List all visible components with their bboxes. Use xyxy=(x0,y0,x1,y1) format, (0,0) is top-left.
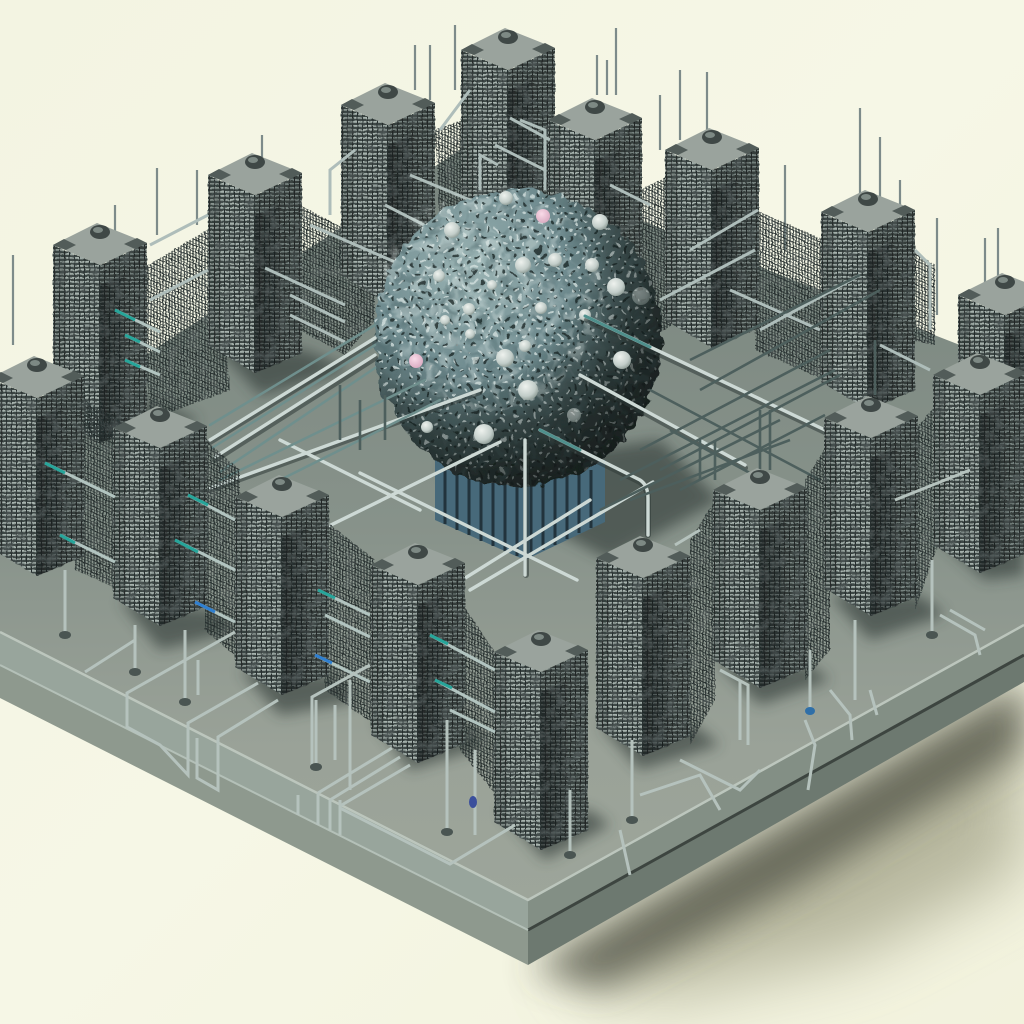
tower: front 5 xyxy=(235,475,329,695)
main pipes from the core xyxy=(210,316,825,600)
tower: front corner 10 xyxy=(494,630,588,850)
tower: back row 6 xyxy=(341,83,435,303)
tower: right 15 xyxy=(824,396,918,616)
tower: back row 9 xyxy=(548,98,642,318)
tower: left 2 xyxy=(53,223,147,443)
tower: left 4 xyxy=(208,153,302,373)
tower: right 13 xyxy=(713,468,807,688)
tower: front 7 xyxy=(371,543,465,763)
tower: left 3 xyxy=(113,406,207,626)
tower: front 11 xyxy=(596,536,690,756)
right side pipe bundles xyxy=(340,275,880,510)
post foot nodes xyxy=(59,631,938,859)
tower: left front 1 xyxy=(0,356,84,576)
platform xyxy=(0,150,1024,965)
tower: far right 17 xyxy=(958,273,1024,493)
heat sink base under the core xyxy=(435,460,605,560)
tower: right 14 xyxy=(821,190,915,410)
mesh between front towers xyxy=(75,395,940,800)
tower: far right 16 xyxy=(933,353,1024,573)
pipes behind the core xyxy=(150,90,930,370)
tower: back row 12 xyxy=(665,128,759,348)
central core sphere xyxy=(374,189,662,487)
core nodules xyxy=(421,191,650,444)
antennas xyxy=(13,25,998,345)
platform cast shadow xyxy=(530,680,1024,1000)
pink nodules xyxy=(409,209,550,368)
tower shadows on floor xyxy=(70,345,1024,860)
floor pipes and posts xyxy=(65,470,985,875)
tower: back row 8 xyxy=(461,28,555,248)
teal-tipped short pipes on towers xyxy=(45,310,495,732)
wire mesh between back towers xyxy=(140,115,935,420)
